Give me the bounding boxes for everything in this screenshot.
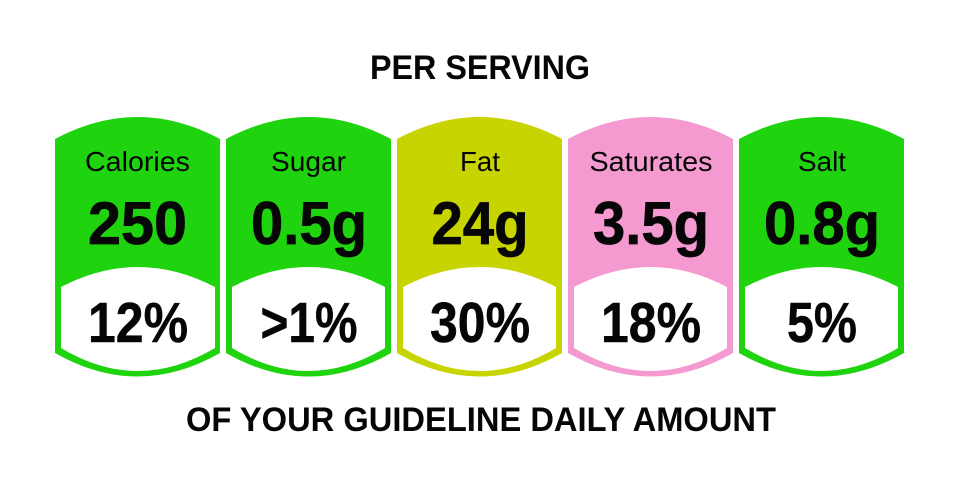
panel: sugar: 0.5g bbox=[251, 190, 367, 257]
panel: sugar: Sugar bbox=[271, 146, 346, 177]
panel: fat: Fat bbox=[460, 146, 500, 177]
panel: salt: Salt bbox=[798, 146, 846, 177]
panel: saturates bbox=[568, 117, 733, 376]
panel: salt bbox=[739, 117, 904, 376]
panel: calories: 250 bbox=[88, 190, 187, 257]
panel: salt: 0.8g bbox=[764, 190, 880, 257]
panel: saturates: Saturates bbox=[590, 146, 712, 177]
panel: fat bbox=[397, 117, 562, 376]
panel: sugar bbox=[226, 117, 391, 376]
panel: sugar: >1% bbox=[260, 291, 358, 355]
panel: saturates: 18% bbox=[601, 291, 701, 355]
panel: calories bbox=[55, 117, 220, 376]
footer caption: OF YOUR GUIDELINE DAILY AMOUNT bbox=[186, 401, 776, 439]
title: PER SERVING bbox=[370, 49, 590, 87]
panel: fat: 30% bbox=[430, 291, 530, 355]
panel: fat: 24g bbox=[432, 190, 528, 257]
panel: salt: 5% bbox=[787, 291, 857, 355]
panel: saturates: 3.5g bbox=[593, 190, 709, 257]
panel: calories: Calories bbox=[85, 146, 190, 177]
panel: calories: 12% bbox=[88, 291, 188, 355]
